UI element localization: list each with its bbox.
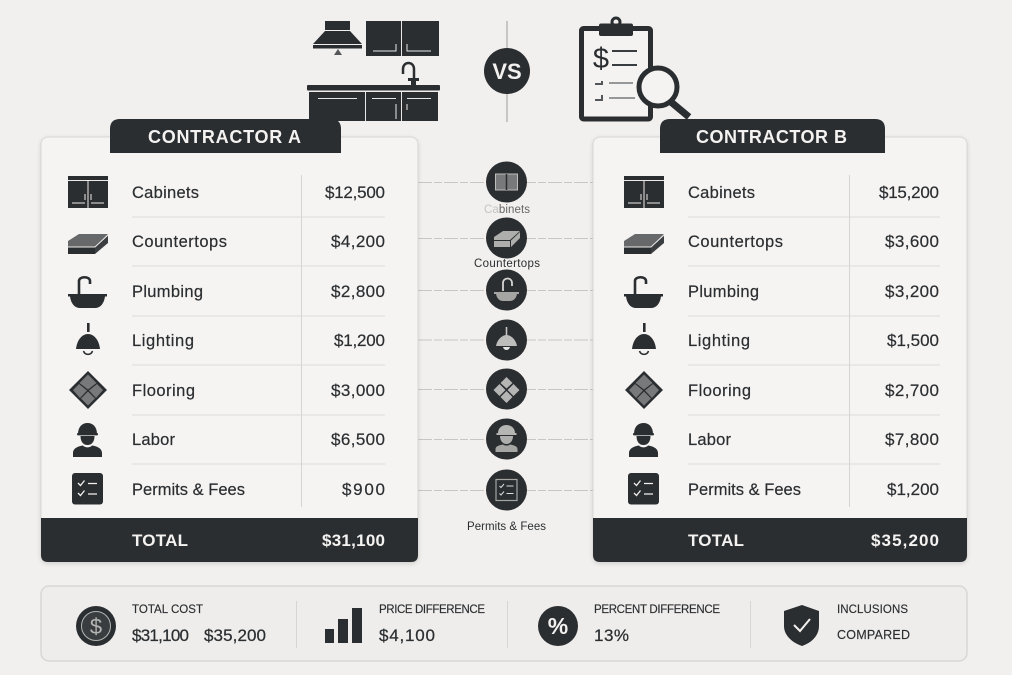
- row: plumbing: Plumbing: [688, 283, 759, 301]
- row: flooring: $3,000: [331, 381, 385, 400]
- row: flooring: $2,700: [885, 381, 939, 400]
- center label: countertops: Countertops: [474, 258, 540, 270]
- row: permits and fees: $1,200: [887, 480, 939, 499]
- row: plumbing: $2,800: [331, 282, 385, 301]
- row: lighting: Lighting: [132, 332, 194, 350]
- heading: contractor B: CONTRACTOR B: [696, 127, 847, 147]
- center icon: flooring: [486, 368, 527, 410]
- summary: percent difference: PERCENT DIFFERENCE: [594, 604, 720, 616]
- row: labor: [73, 423, 385, 457]
- icon: kitchen illustration: [307, 21, 440, 121]
- icon: clipboard with magnifying glass: $: [593, 43, 609, 75]
- contractor B footer: $35,200: [871, 531, 939, 550]
- row: flooring: Flooring: [132, 382, 195, 400]
- contractor B footer: TOTAL: [688, 531, 744, 550]
- row: lighting: [632, 323, 939, 354]
- row: plumbing: Plumbing: [132, 283, 203, 301]
- summary: price difference: [325, 604, 485, 645]
- row: flooring: [625, 371, 939, 409]
- row: cabinets: Cabinets: [688, 184, 755, 202]
- summary: inclusions compared: [784, 604, 910, 646]
- summary: total cost: $: [90, 614, 102, 639]
- contractor A footer: [41, 518, 418, 562]
- vs divider line: [506, 21, 508, 122]
- summary: percent difference: %: [548, 613, 568, 639]
- center icon: permits and fees: [486, 470, 527, 510]
- row: labor: $6,500: [331, 430, 385, 449]
- summary: total cost: $35,200: [204, 626, 266, 645]
- summary: price difference: PRICE DIFFERENCE: [379, 604, 485, 616]
- summary: inclusions compared: COMPARED: [837, 628, 910, 642]
- row: permits and fees: [628, 473, 939, 504]
- row: labor: Labor: [688, 431, 732, 449]
- row: lighting: $1,500: [887, 331, 939, 350]
- row: countertops: $4,200: [331, 232, 385, 251]
- row: permits and fees: $900: [342, 480, 385, 499]
- row: flooring: [69, 371, 385, 409]
- contractor B footer: [593, 518, 967, 562]
- vs badge: VS: [492, 59, 522, 84]
- panel: summary bar: [41, 586, 967, 661]
- panel: contractor B: [593, 137, 967, 562]
- icon: clipboard with magnifying glass: [582, 18, 689, 119]
- summary: total cost: [76, 604, 266, 646]
- row: cabinets: Cabinets: [132, 184, 199, 202]
- row: cabinets: [68, 176, 385, 208]
- row: countertops: Countertops: [688, 233, 783, 251]
- heading: contractor A: [110, 119, 341, 153]
- row: plumbing: $3,200: [885, 282, 939, 301]
- center column: category icons: [467, 162, 546, 533]
- row: flooring: Flooring: [688, 382, 751, 400]
- row: countertops: [68, 232, 385, 254]
- center icon: labor: [486, 418, 527, 460]
- row: labor: $7,800: [885, 430, 939, 449]
- row: countertops: $3,600: [885, 232, 939, 251]
- center label: permits and fees: Permits & Fees: [467, 521, 546, 533]
- center icon: cabinets: [486, 162, 527, 202]
- row: permits and fees: [72, 473, 385, 504]
- row: lighting: Lighting: [688, 332, 750, 350]
- row: permits and fees: Permits & Fees: [688, 481, 801, 499]
- summary: percent difference: [538, 604, 720, 646]
- row: countertops: Countertops: [132, 233, 227, 251]
- connector lines: [418, 182, 593, 490]
- row: plumbing: [68, 277, 385, 308]
- summary: inclusions compared: INCLUSIONS: [837, 604, 908, 616]
- row: labor: [629, 423, 939, 457]
- summary: price difference: $4,100: [379, 626, 435, 645]
- center label: cabinets: Cabinets: [484, 204, 530, 216]
- vs badge: [484, 48, 530, 94]
- summary: percent difference: 13%: [594, 626, 629, 645]
- row: cabinets: $15,200: [879, 183, 939, 202]
- row: countertops: [624, 232, 939, 254]
- center icon: plumbing: [486, 270, 527, 310]
- summary: total cost: TOTAL COST: [132, 604, 203, 616]
- contractor A footer: $31,100: [322, 531, 385, 550]
- row: lighting: $1,200: [334, 331, 385, 350]
- row: lighting: [76, 323, 385, 354]
- heading: contractor A: CONTRACTOR A: [148, 127, 301, 147]
- summary: total cost: $31,100: [132, 626, 189, 645]
- row: plumbing: [624, 277, 939, 308]
- center icon: countertops: [486, 218, 527, 258]
- heading: contractor B: [660, 119, 885, 153]
- row: cabinets: $12,500: [325, 183, 385, 202]
- panel: contractor A: [41, 137, 418, 562]
- row: cabinets: [624, 176, 939, 208]
- center icon: lighting: [486, 320, 527, 360]
- row: permits and fees: Permits & Fees: [132, 481, 245, 499]
- row: labor: Labor: [132, 431, 176, 449]
- contractor A footer: TOTAL: [132, 531, 188, 550]
